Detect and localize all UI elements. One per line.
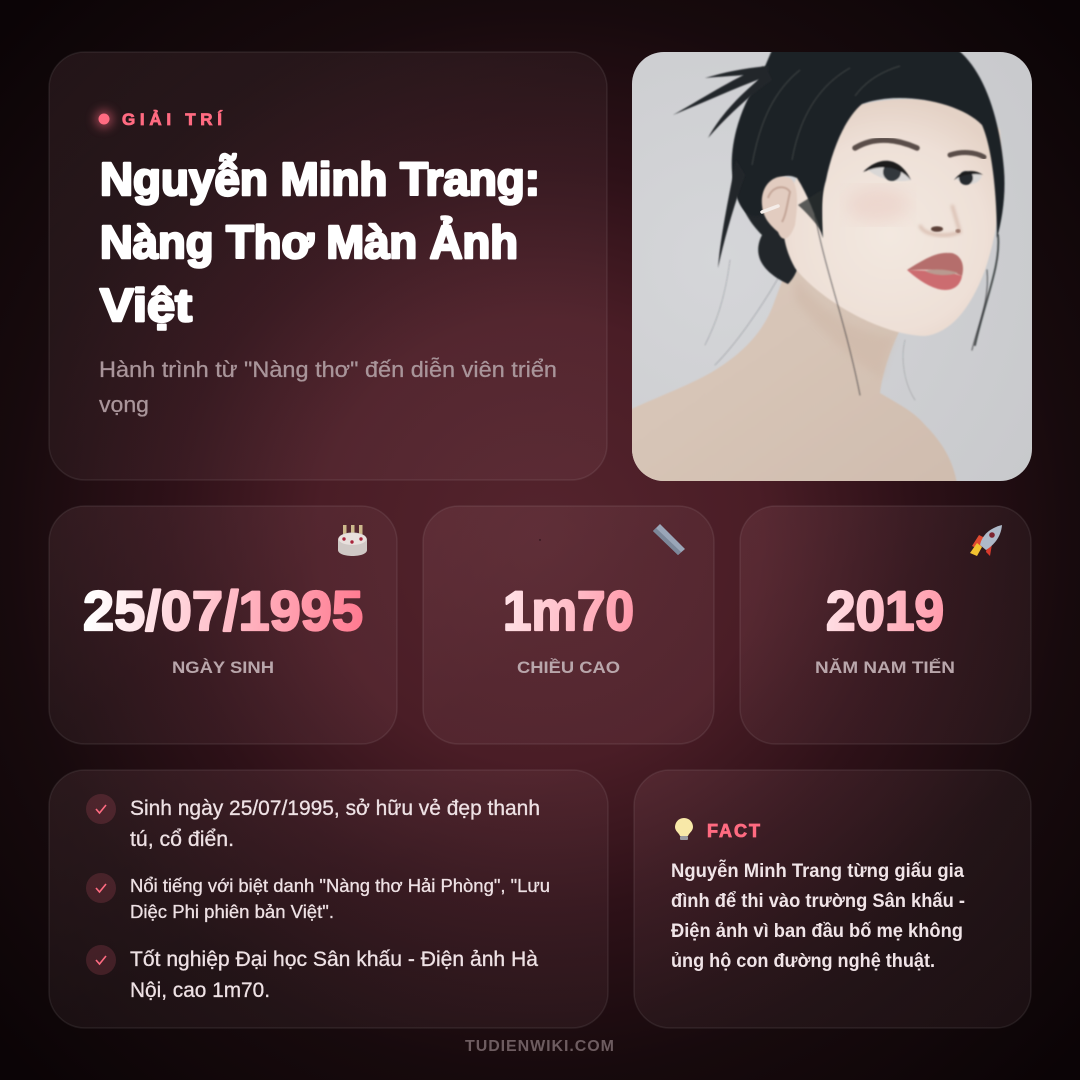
icon: light bulb [675, 818, 693, 840]
label: debut year: NĂM NAM TIẾN [815, 658, 955, 677]
bullet 1 [86, 794, 540, 851]
subtitle [99, 357, 557, 417]
bullet 2: Nổi tiếng với biệt danh "Nàng thơ Hải Phòng", "Lưu [130, 875, 550, 896]
bullet 3: Nội, cao 1m70. [130, 978, 270, 1002]
fact text: đình để thi vào trường Sân khấu - [671, 891, 965, 912]
footer credit: TUDIENWIKI.COM [465, 1038, 614, 1055]
subtitle: vọng [99, 392, 149, 417]
shoulders and neck [632, 270, 957, 481]
fact text: Điện ảnh vì ban đầu bố mẹ không [671, 921, 963, 942]
title: Nàng Thơ Màn Ảnh [100, 216, 518, 268]
title: Việt [100, 279, 192, 331]
blush [852, 190, 906, 222]
portrait photo illustration [625, 50, 1032, 490]
hair highlights [752, 66, 900, 165]
fact text [671, 860, 965, 972]
icon: ruler [539, 524, 685, 555]
eyes [863, 161, 983, 185]
icon: rocket [970, 525, 1002, 556]
label: birth date: NGÀY SINH [172, 658, 274, 677]
bullet 3 [86, 945, 538, 1002]
value: debut year: 2019 [826, 579, 944, 642]
hair strands [673, 66, 998, 400]
bullet 1: tú, cổ điển. [130, 827, 234, 851]
value: height: 1m70 [503, 579, 634, 642]
bullet 2 [86, 873, 550, 922]
fact text: Nguyễn Minh Trang từng giấu gia [671, 860, 964, 882]
fact text: ủng hộ con đường nghệ thuật. [671, 951, 935, 972]
bullet 3: Tốt nghiệp Đại học Sân khấu - Điện ảnh Hà [130, 947, 538, 971]
lips [907, 253, 963, 290]
panel: title card [49, 52, 607, 480]
panel: stat height [423, 506, 714, 744]
title: Nguyễn Minh Trang: [100, 153, 540, 205]
title [100, 153, 540, 331]
hair [732, 50, 1005, 238]
panel: stat debut year [740, 506, 1031, 744]
value: birth date: 25/07/1995 [83, 579, 363, 642]
icon: cake [338, 525, 367, 556]
panel: key points [49, 770, 608, 1028]
bullet 1: Sinh ngày 25/07/1995, sở hữu vẻ đẹp thanh [130, 796, 540, 820]
bullet 2: Diệc Phi phiên bản Việt". [130, 901, 334, 922]
panel: stat birth date [49, 506, 397, 744]
bun [742, 206, 798, 285]
label: height: CHIỀU CAO [517, 658, 620, 677]
panel: fact [634, 770, 1031, 1028]
fact heading: FACT [707, 821, 760, 841]
category tag: GIẢI TRÍ [122, 110, 223, 129]
nose [920, 205, 960, 235]
brows [855, 140, 984, 157]
subtitle: Hành trình từ "Nàng thơ" đến diễn viên triển [99, 357, 557, 382]
ear and cuff [762, 177, 797, 239]
face [783, 99, 1001, 336]
